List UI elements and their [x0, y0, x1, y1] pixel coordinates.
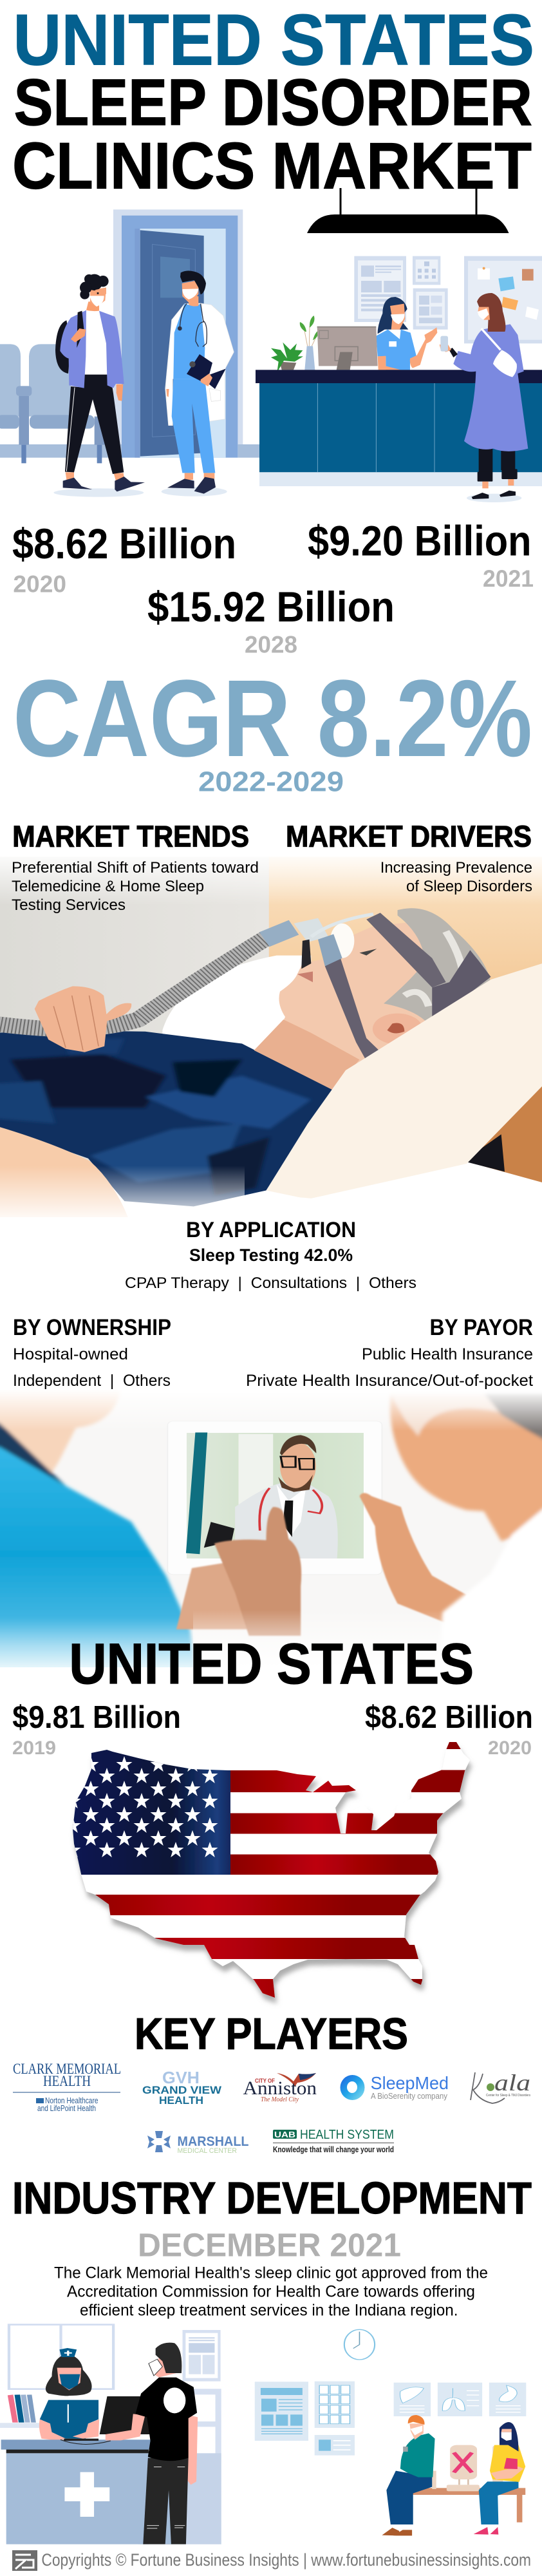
- by payor: Public Health Insurance: [362, 1345, 533, 1363]
- photo: CPAP patient in bed: [0, 850, 542, 1236]
- logo: SleepMed: A BioSerenity company: [371, 2091, 447, 2101]
- 2020 value: 2020: [13, 571, 66, 598]
- logo: City of Anniston: The Model City: [261, 2096, 299, 2103]
- information posters: [255, 2382, 526, 2456]
- counter with cross: [1, 2439, 221, 2544]
- logo: Grand View Health: GVH: [162, 2068, 200, 2087]
- 2021 value: 2021: [483, 565, 534, 592]
- illustration: clinic reception and waiting room: [0, 2325, 526, 2544]
- by ownership: Independent | Others: [13, 1372, 171, 1390]
- heading: key players: KEY PLAYERS: [135, 2009, 408, 2058]
- reception counter: [256, 370, 542, 486]
- 2020 value: [12, 520, 236, 598]
- computer: [100, 2396, 151, 2434]
- by application: [125, 1218, 416, 1292]
- patient with backpack: [55, 274, 145, 491]
- development description: Accreditation Commission for Health Care towards offering: [67, 2283, 475, 2301]
- computer monitor: [317, 327, 378, 370]
- market drivers: [286, 819, 532, 895]
- by ownership: Hospital-owned: [13, 1345, 128, 1363]
- left clinician neck and scrubs: [0, 1378, 196, 1674]
- market trends: Preferential Shift of Patients toward: [12, 859, 259, 876]
- wall clock: [344, 2329, 375, 2360]
- logo: Clark Memorial Health: Norton Healthcare: [45, 2096, 98, 2105]
- development description: efficient sleep treatment services in the Indiana region.: [80, 2302, 458, 2320]
- development description: The Clark Memorial Health's sleep clinic got approved from the: [54, 2264, 488, 2282]
- logo: UAB Health System: HEALTH SYSTEM: [300, 2128, 394, 2142]
- waiting chairs: [0, 344, 105, 463]
- icon: Fortune Business Insights logo: [12, 2550, 37, 2571]
- market trends: Testing Services: [12, 896, 126, 914]
- by payor: Private Health Insurance/Out-of-pocket: [246, 1372, 533, 1390]
- market trends: [12, 819, 259, 914]
- icon: hanging lamp: [307, 188, 509, 233]
- market trends: Telemedicine & Home Sleep: [12, 878, 204, 895]
- logo: Clark Memorial Health: [13, 2061, 121, 2113]
- plant and vase: [271, 316, 320, 372]
- logo: Grand View Health: [142, 2068, 222, 2107]
- logo: City of Anniston: Anniston: [243, 2078, 317, 2099]
- logo: City of Anniston: CITY OF: [255, 2078, 275, 2084]
- map: United States flag: [64, 1739, 476, 2009]
- US 2019 value: 2019: [12, 1738, 56, 1759]
- hands and right clinician: [176, 1493, 467, 1636]
- market drivers: Increasing Prevalence: [380, 859, 532, 876]
- wall posters: [354, 256, 448, 330]
- by application: Sleep Testing 42.0%: [189, 1245, 353, 1265]
- receptionist: [376, 297, 437, 370]
- by application: BY APPLICATION: [186, 1218, 356, 1242]
- logo: Marshall Medical Center: [147, 2131, 249, 2155]
- logo: UAB Health System: UAB: [274, 2130, 295, 2139]
- by ownership: [13, 1315, 171, 1390]
- 2020 value: $8.62 Billion: [12, 520, 236, 567]
- logo: Marshall Medical Center: MARSHALL: [178, 2134, 249, 2149]
- logo: Clark Memorial Health: and LifePoint Health: [37, 2103, 96, 2113]
- by payor: [246, 1315, 533, 1390]
- 2028 value: [147, 583, 395, 658]
- logo: Clark Memorial Health: HEALTH: [43, 2073, 91, 2089]
- logo: Koala: ala: [494, 2070, 530, 2096]
- logo: UAB Health System: Knowledge that will change your world: [273, 2145, 394, 2154]
- 2028 value: 2028: [245, 631, 297, 658]
- logo: City of Anniston: [243, 2073, 317, 2103]
- seated man with phone: [382, 2415, 435, 2535]
- by ownership: BY OWNERSHIP: [13, 1315, 171, 1340]
- market drivers: of Sleep Disorders: [406, 878, 532, 895]
- illustration: patient and doctor at door: [0, 209, 260, 497]
- visitor in lavender coat: [440, 293, 528, 499]
- nurse: [39, 2348, 99, 2441]
- logo: Marshall Medical Center: MEDICAL CENTER: [178, 2147, 237, 2155]
- logo: UAB Health System: [273, 2128, 394, 2154]
- market size figures: [12, 516, 534, 658]
- 2028 value: $15.92 Billion: [147, 583, 395, 630]
- title: [12, 0, 534, 202]
- seated woman with handbag: [474, 2422, 525, 2535]
- US 2019 value: [12, 1700, 181, 1759]
- logo: SleepMed: SleepMed: [371, 2073, 449, 2093]
- US 2019 value: $9.81 Billion: [12, 1700, 181, 1735]
- waiting bench with distancing sign: [411, 2445, 525, 2523]
- notice board: [464, 256, 542, 343]
- logo: Grand View Health: HEALTH: [159, 2094, 203, 2107]
- market trends: MARKET TRENDS: [12, 819, 249, 853]
- reception wall: [0, 2325, 221, 2544]
- logo: Koala: [471, 2070, 530, 2103]
- photo: telehealth tablet consultation: [0, 1340, 542, 1700]
- logo: SleepMed: [340, 2073, 449, 2101]
- development description: [54, 2264, 488, 2320]
- patient at counter: [106, 2343, 198, 2544]
- logo: Koala: Center for Sleep & TMJ Disorders: [486, 2094, 530, 2098]
- date: December 2021: DECEMBER 2021: [138, 2227, 401, 2263]
- by application: CPAP Therapy | Consultations | Others: [125, 1274, 416, 1292]
- logo: Clark Memorial Health: CLARK MEMORIAL: [13, 2061, 121, 2077]
- CAGR callout: 2022-2029: [198, 766, 344, 797]
- US 2020 value: 2020: [488, 1738, 532, 1759]
- doctor with clipboard: [165, 270, 234, 494]
- by payor: BY PAYOR: [430, 1315, 533, 1340]
- 2021 value: [308, 516, 534, 592]
- logo: Grand View Health: GRAND VIEW: [142, 2084, 222, 2096]
- illustration: reception desk: [256, 256, 542, 502]
- heading: United States: UNITED STATES: [69, 1632, 474, 1696]
- US 2020 value: [365, 1700, 533, 1759]
